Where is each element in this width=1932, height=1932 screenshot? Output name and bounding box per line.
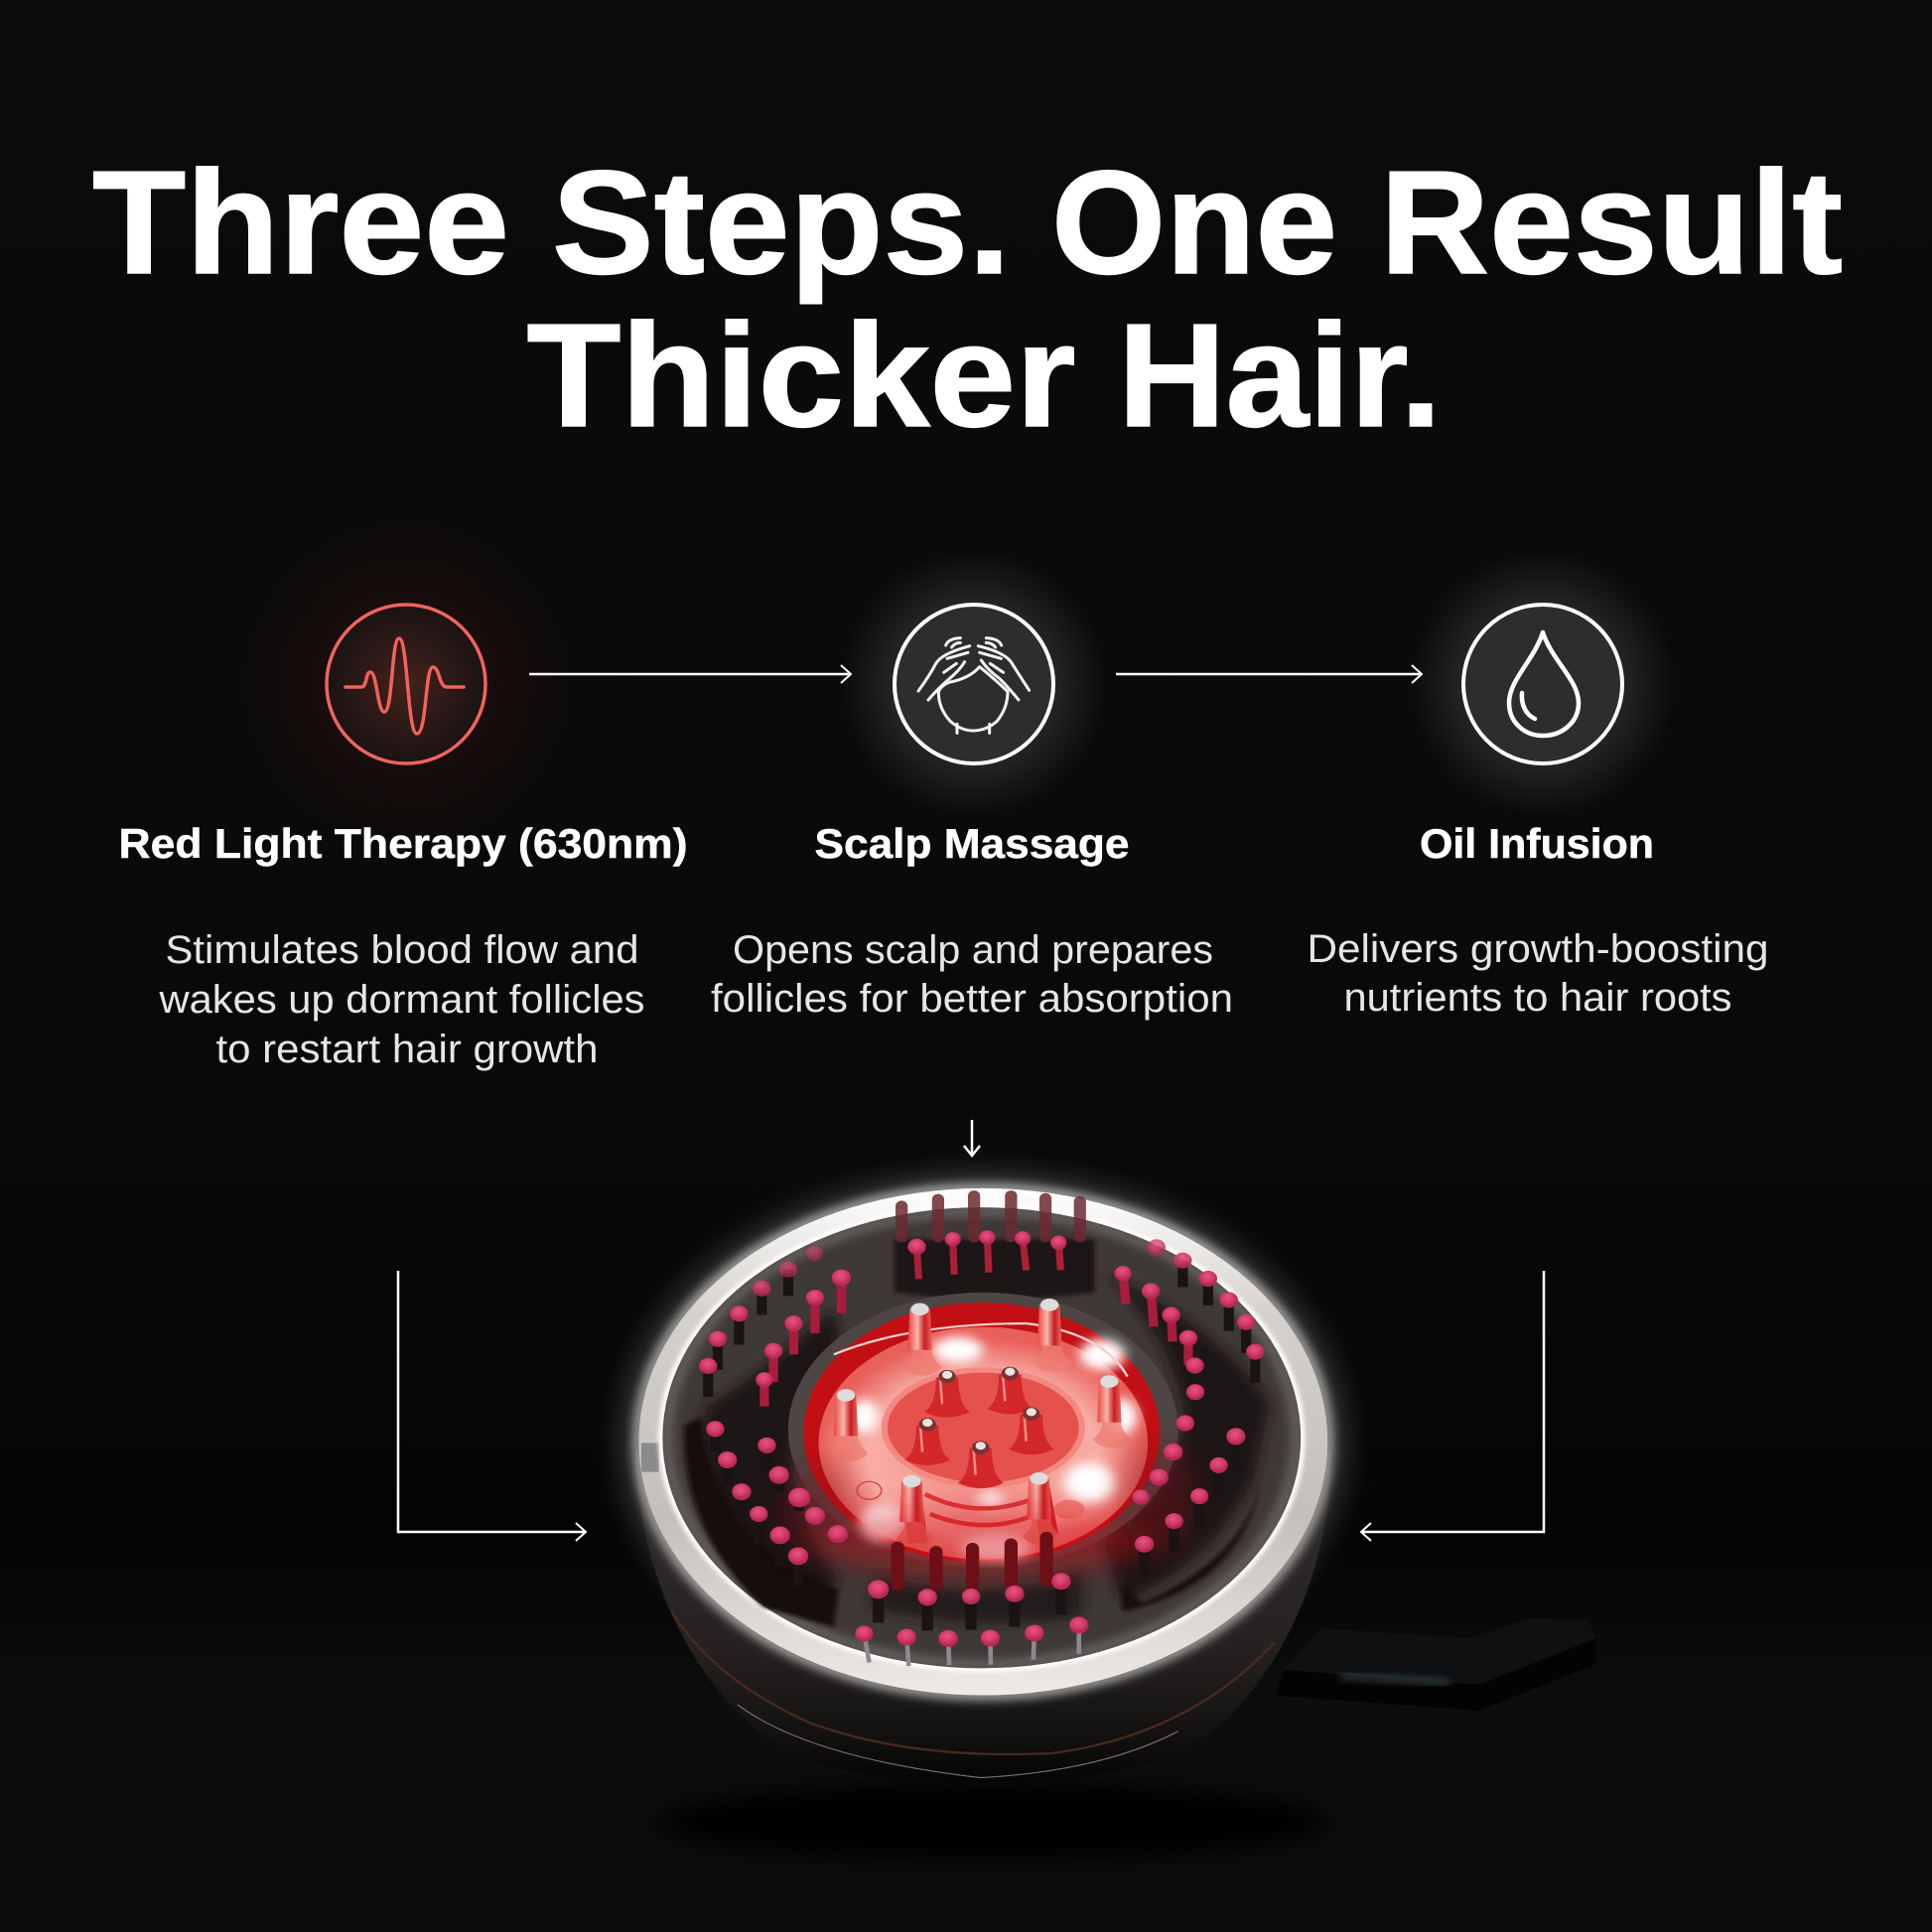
arrow: left elbow into device <box>398 1271 586 1541</box>
step 3 description <box>1307 927 1769 1020</box>
step 1 description <box>158 928 645 1071</box>
outer and inner pin rows <box>699 1239 1264 1666</box>
step 2 description <box>711 928 1233 1021</box>
step 1 description: to restart hair growth <box>216 1028 598 1071</box>
central glowing disc <box>788 1293 1178 1568</box>
centre cone nodes <box>904 1367 1054 1488</box>
device body <box>635 1451 1331 1782</box>
title: One <box>1051 141 1337 305</box>
interior shading <box>684 1239 1270 1627</box>
interior edge glow <box>666 1211 1297 1665</box>
title: Hair. <box>1118 294 1442 458</box>
floor shadow <box>655 1784 1330 1860</box>
title: Steps. <box>552 141 1011 305</box>
step 1 icon: red light wave <box>272 550 540 818</box>
step 1 description: wakes up dormant follicles <box>158 978 645 1022</box>
red light bleed <box>783 1439 1193 1576</box>
arrow: right elbow into device <box>1361 1271 1544 1541</box>
step 2 heading: Scalp Massage <box>814 820 1130 867</box>
step 1 description: Stimulates blood flow and <box>165 928 639 972</box>
tall silver-tip pegs <box>830 1299 1132 1548</box>
step 1 heading: Red Light Therapy (630nm) <box>119 820 687 867</box>
arrow: step 2 to step 3 <box>1116 665 1422 683</box>
white light ring <box>638 1188 1327 1696</box>
step 2 description: follicles for better absorption <box>711 977 1233 1021</box>
title: Result <box>1380 141 1843 305</box>
step 2 description: Opens scalp and prepares <box>733 928 1213 972</box>
device glow <box>631 1182 1335 1701</box>
step 3 description: nutrients to hair roots <box>1344 976 1731 1020</box>
title: Three <box>92 141 509 305</box>
charging dock and cable <box>1276 1618 1596 1711</box>
title <box>92 141 1843 458</box>
title: Thicker <box>526 294 1076 458</box>
arrow: down into device <box>964 1120 980 1156</box>
step 2 icon: scalp massage <box>840 550 1108 818</box>
step 3 description: Delivers growth-boosting <box>1307 927 1769 971</box>
top comb pins <box>901 1195 1080 1279</box>
step 3 icon: oil drop <box>1409 550 1677 818</box>
product: red light scalp device <box>631 1182 1335 1782</box>
step 3 heading: Oil Infusion <box>1420 820 1654 867</box>
arrow: step 1 to step 2 <box>529 665 851 683</box>
interior floor <box>662 1207 1301 1668</box>
